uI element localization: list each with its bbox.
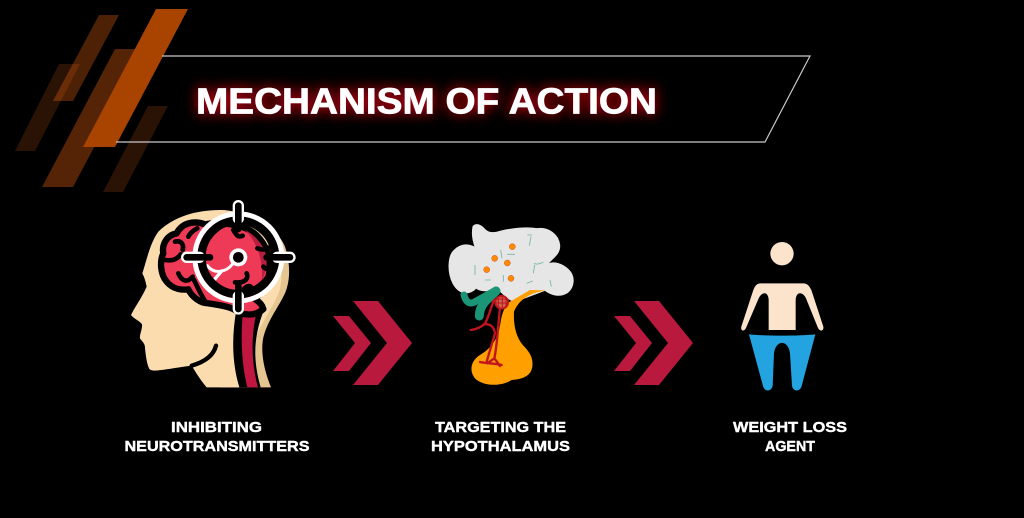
- title: MECHANISM OF ACTION: [196, 80, 657, 122]
- label: weight loss agent: WEIGHT LOSS: [733, 419, 847, 436]
- orange stalk and pituitary: [471, 290, 547, 385]
- vessel mesh: [495, 296, 508, 309]
- orange dots: [484, 244, 515, 281]
- head silhouette: [131, 210, 289, 387]
- title: MECHANISM OF ACTION: [196, 80, 657, 122]
- target ring: [187, 206, 290, 309]
- label: inhibiting neurotransmitters: INHIBITING: [171, 419, 262, 436]
- label: weight loss agent: [733, 419, 847, 455]
- teal details: [475, 235, 551, 287]
- red vessels: [471, 300, 502, 366]
- title banner frame: [116, 56, 810, 142]
- icon: weight loss person: [741, 242, 823, 390]
- jaw line: [192, 346, 216, 366]
- label: inhibiting neurotransmitters: [124, 419, 310, 455]
- teal tract: [464, 290, 496, 316]
- label: targeting the hypothalamus: HYPOTHALAMUS: [431, 438, 570, 455]
- torso and arms: [741, 283, 823, 331]
- head: [770, 242, 794, 265]
- label: targeting the hypothalamus: [431, 419, 570, 455]
- brain shadow: [245, 230, 267, 280]
- decorative slanted bars: [15, 9, 188, 192]
- icon: hypothalamus: [449, 225, 573, 385]
- brain: [161, 222, 270, 314]
- spinal cord: [233, 308, 264, 387]
- brain folds: [165, 228, 274, 301]
- grey brain tissue: [449, 225, 573, 301]
- white fold highlight: [207, 260, 235, 282]
- label: weight loss agent: AGENT: [765, 438, 815, 455]
- label: inhibiting neurotransmitters: NEUROTRANSMITTERS: [124, 438, 310, 455]
- chevron arrow 1: [333, 301, 412, 385]
- icon: head with brain and target: [131, 206, 290, 387]
- trousers: [749, 334, 815, 390]
- chevron arrow 2: [614, 301, 693, 385]
- label: targeting the hypothalamus: TARGETING THE: [435, 419, 566, 436]
